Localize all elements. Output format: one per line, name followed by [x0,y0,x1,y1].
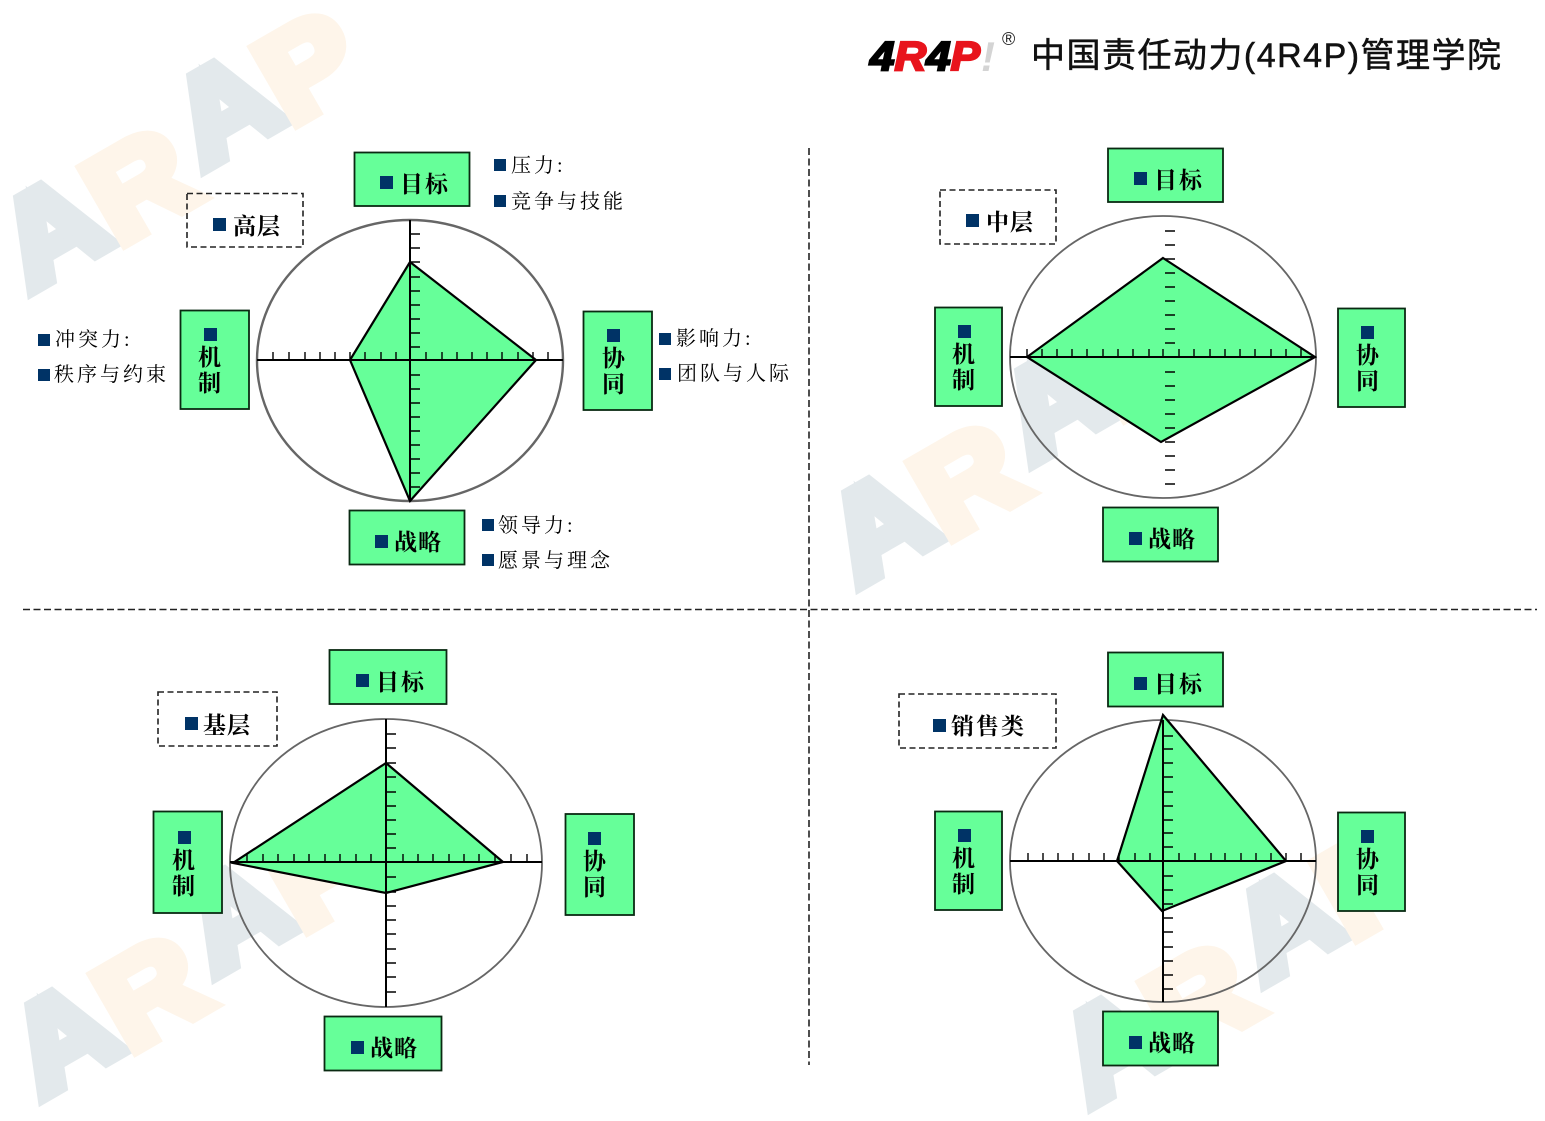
annotation top: 竞争与技能 [511,190,626,213]
label 机制: 制 [172,874,195,899]
label 协同: 同 [583,875,606,900]
label 机制: 制 [952,368,975,393]
annotation right: 团队与人际 [677,362,792,385]
label 目标 [1108,652,1223,706]
axis ticks [247,734,527,992]
panel: 中层 [935,148,1405,562]
watermark bottom-right: A [1206,837,1362,1008]
label 协同 [566,814,634,915]
label 目标 [330,650,446,704]
label 战略 [350,510,464,564]
label 基层 [158,692,277,746]
radar polygon [233,763,503,893]
label 协同: 同 [1356,369,1379,394]
radar circle [257,220,563,501]
label 协同 [1338,308,1405,407]
watermark bottom-right: R [1121,914,1277,1085]
panel: 销售类 [899,652,1405,1066]
label 机制 [935,812,1002,910]
watermark bottom-right [1033,798,1443,1121]
logo exclamation: ! [981,33,995,80]
watermark centre-right: P [1061,278,1211,445]
label 战略: 战略 [1148,527,1196,552]
axes [257,220,563,501]
label 机制: 机 [172,848,195,873]
label 机制: 机 [198,345,221,370]
label 销售类: 销售类 [951,714,1026,739]
watermark bottom-left: R [72,906,228,1077]
annotation top [494,154,626,213]
label 战略 [324,1016,442,1070]
watermark bottom-left: P [244,790,394,957]
label 协同: 同 [1356,873,1379,898]
label 目标: 目标 [1154,672,1204,697]
logo mark 4R4P: 4R4P [869,33,981,79]
annotation left: 秩序与约束 [54,363,169,386]
label 目标: 目标 [400,172,450,197]
label 目标 [354,152,470,206]
watermark centre-right: A [974,317,1130,488]
label 协同: 同 [602,372,625,397]
radar polygon [350,262,536,501]
divider horizontal [23,608,1537,610]
radar circle [230,719,542,1007]
label 目标 [1108,148,1223,202]
radar circle [1010,720,1316,1002]
watermark centre-right: A [801,439,957,610]
label 中层 [940,190,1056,244]
annotation top: 压力: [511,154,566,177]
label 机制: 机 [952,342,975,367]
institute name: 中国责任动力(4R4P)管理学院 [1031,37,1501,75]
label 基层: 基层 [203,713,251,738]
label 目标: 目标 [1154,168,1204,193]
watermark top-left: R [61,99,217,270]
watermark top-left: A [146,22,302,193]
annotation right [659,327,792,385]
watermark bottom-left: A [157,829,313,1000]
label 战略: 战略 [394,530,442,555]
label 协同: 协 [1356,343,1381,368]
watermark centre-right [801,278,1211,610]
label 战略 [1103,508,1218,562]
panel: 基层 [154,650,634,1070]
radar circle [1010,216,1316,498]
radar polygon [1117,715,1286,911]
radar polygon [1027,258,1315,442]
label 机制 [154,812,222,913]
annotation left: 冲突力: [55,328,133,351]
annotation bottom: 愿景与理念 [498,549,613,572]
label 高层 [187,194,303,247]
label 协同 [1338,812,1405,911]
annotation bottom: 领导力: [498,514,576,537]
label 机制: 制 [952,872,975,897]
label 机制 [180,310,249,409]
label 战略: 战略 [1148,1031,1196,1056]
label 机制: 制 [198,371,221,396]
watermark centre-right: R [889,394,1045,565]
watermark bottom-left [0,790,394,1121]
axis ticks [1027,231,1301,484]
label 目标: 目标 [376,670,426,695]
label 协同: 协 [1356,847,1381,872]
axis ticks [273,234,548,487]
horizontal axis [1010,356,1316,358]
axis ticks [1028,736,1301,989]
label 机制 [935,308,1002,406]
axes [1010,720,1316,1002]
panel: 高层 [38,152,792,572]
label 协同 [584,312,652,410]
label 协同: 协 [583,849,608,874]
annotation bottom [482,514,613,572]
label 机制: 机 [952,846,975,871]
axes [230,719,542,1007]
label 协同: 协 [602,346,627,371]
annotation left [38,328,169,386]
label 销售类 [899,694,1056,748]
registered mark: ® [1002,29,1015,49]
divider vertical [808,148,810,1065]
label 中层: 中层 [986,210,1034,235]
logo header [869,29,1501,80]
watermark bottom-right: P [1293,798,1443,965]
label 战略 [1103,1012,1218,1066]
label 战略: 战略 [370,1036,418,1061]
watermark top-left [0,0,383,315]
annotation right: 影响力: [676,327,754,350]
label 高层: 高层 [233,214,281,239]
